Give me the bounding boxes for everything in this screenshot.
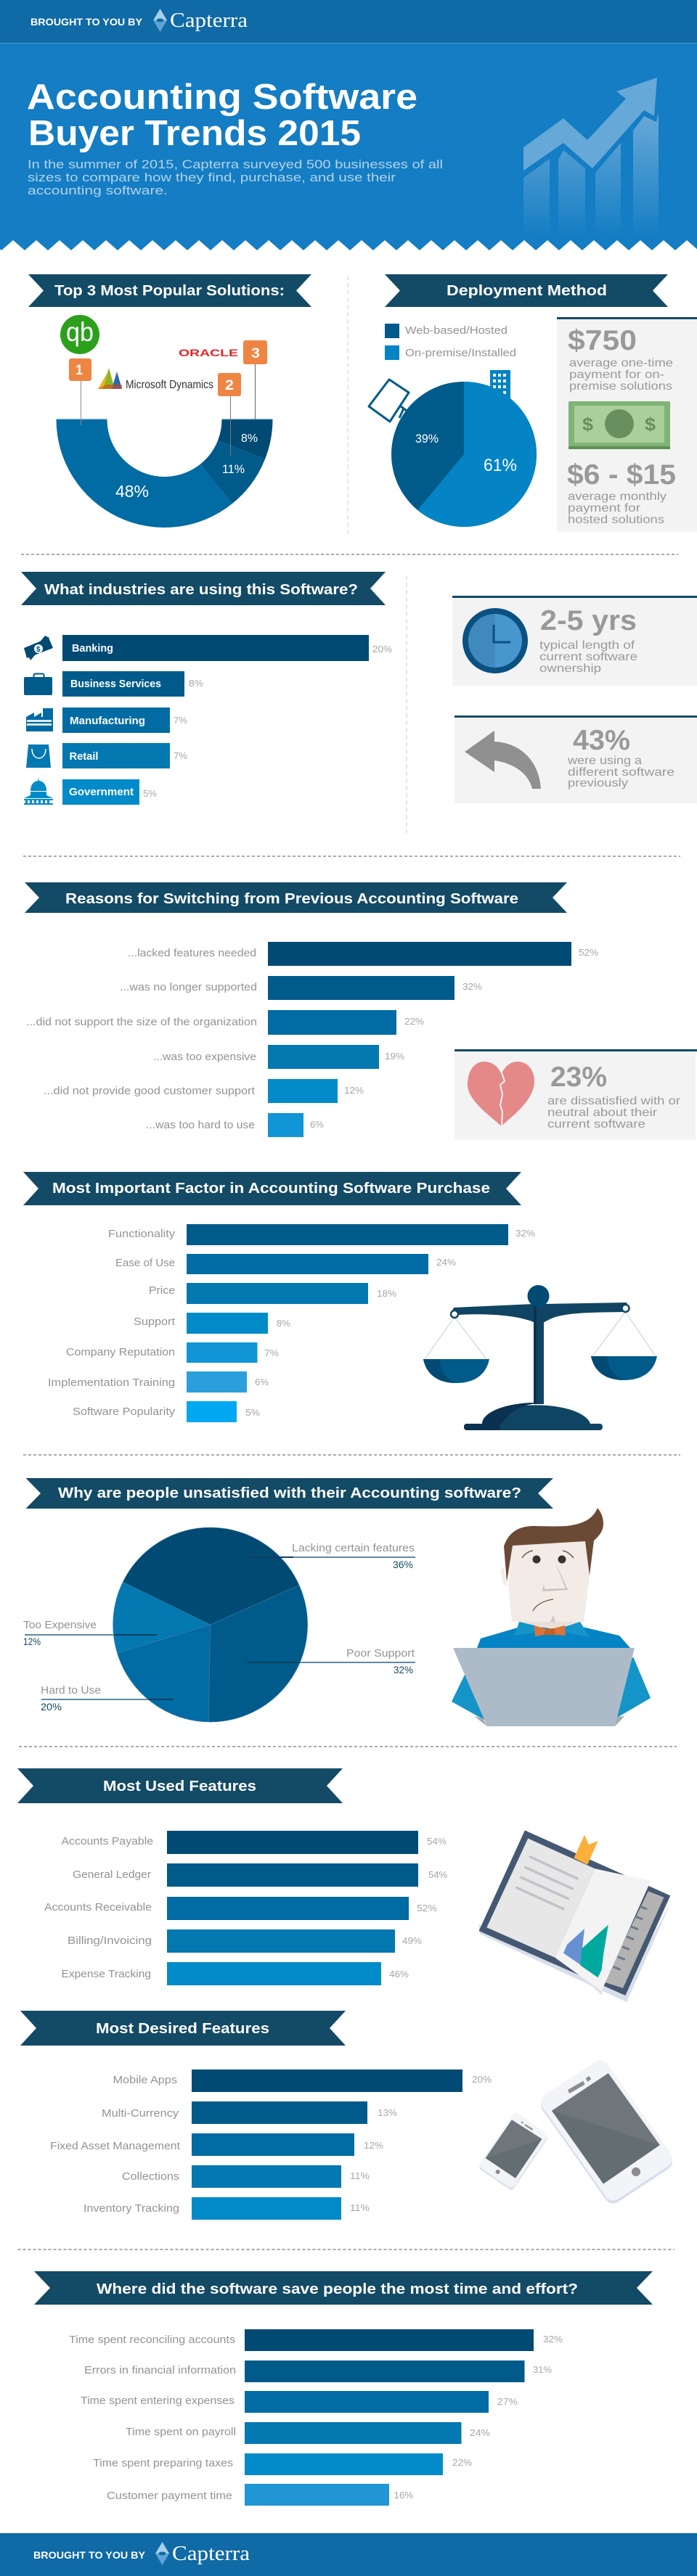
panel: pricing stats: $6 - $15	[567, 459, 676, 491]
legend: Web-based/Hosted	[405, 324, 508, 337]
bar: Fixed Asset Management: 12%	[364, 2140, 383, 2151]
heading: Most Desired Features	[96, 2021, 269, 2037]
pie chart	[113, 1527, 308, 1722]
icon: broken heart	[468, 1062, 534, 1126]
bar: Accounts Payable: Accounts Payable	[61, 1835, 153, 1847]
panel: previous software: were using a	[567, 755, 642, 767]
bar: General Ledger	[73, 1863, 447, 1887]
heading	[20, 2011, 346, 2046]
bar: Price	[149, 1283, 396, 1304]
bar: Fixed Asset Management: Fixed Asset Management	[50, 2140, 181, 2152]
bar: Billing/Invoicing: 49%	[402, 1935, 422, 1946]
title: Buyer Trends 2015	[28, 114, 361, 153]
panel: dissatisfied: neutral about their	[547, 1107, 658, 1119]
panel: previous software: different software	[568, 766, 674, 779]
callout: Oracle rank 3: 3	[251, 346, 260, 361]
heading	[26, 1478, 553, 1509]
bar: Software Popularity: 5%	[245, 1407, 260, 1418]
bar: Manufacturing: Manufacturing	[70, 715, 145, 727]
bar: Collections: Collections	[122, 2170, 179, 2183]
icon: dollar bill: $	[582, 414, 593, 435]
heading: Where did the software save people the most time and effort?	[97, 2281, 578, 2297]
bar: Collections: 11%	[350, 2170, 370, 2181]
panel: pricing stats: payment for	[568, 502, 641, 514]
bar: Manufacturing	[62, 707, 187, 733]
bar: customer support: 12%	[344, 1085, 364, 1096]
icon: briefcase	[24, 673, 52, 695]
bar: lacked features: ...lacked features needed	[128, 947, 256, 959]
bar: Multi-Currency	[102, 2101, 397, 2124]
heading: Most Important Factor in Accounting Software Purchase	[52, 1181, 490, 1197]
bar: entering expenses	[81, 2391, 518, 2413]
icon: return arrow	[465, 731, 541, 789]
bar: customer payment time: 16%	[394, 2490, 413, 2501]
bar: Multi-Currency: 13%	[378, 2107, 397, 2118]
label: poor support	[247, 1647, 415, 1675]
bar: customer support: ...did not provide good customer support	[44, 1085, 256, 1097]
bar: Multi-Currency: Multi-Currency	[102, 2107, 179, 2120]
bar: no longer supported	[120, 976, 482, 1000]
bar: errors in financial information	[84, 2360, 552, 2382]
heading: What industries are using this Software?	[44, 582, 358, 598]
label: hard to use: Hard to Use	[41, 1684, 101, 1697]
bar: Implementation Training: Implementation Training	[48, 1377, 175, 1389]
label: hard to use	[41, 1684, 174, 1712]
bar: Inventory Tracking: 11%	[350, 2202, 370, 2213]
bar: Ease of Use: Ease of Use	[115, 1257, 175, 1269]
bar: Expense Tracking: Expense Tracking	[61, 1968, 151, 1980]
heading	[23, 1172, 521, 1205]
panel: most important factor	[23, 1172, 657, 1430]
panel: dissatisfied: 23%	[550, 1062, 607, 1093]
icon: dollar bill	[568, 401, 670, 449]
panel: pricing stats	[557, 317, 697, 532]
heading	[21, 572, 386, 605]
label: lacking certain features: 36%	[393, 1559, 413, 1570]
icon: money: $	[36, 646, 41, 654]
title	[27, 78, 417, 153]
bar: Ease of Use	[115, 1254, 456, 1274]
intro text: In the summer of 2015, Capterra surveyed 500 businesses of all	[28, 157, 443, 171]
pie chart	[391, 382, 537, 527]
panel: previous software	[455, 715, 697, 803]
panel: time and effort saved	[34, 2271, 653, 2506]
label: too expensive	[23, 1619, 157, 1647]
label: hard to use: 20%	[41, 1701, 62, 1712]
bar: Retail: 7%	[174, 750, 187, 761]
bar: customer payment time	[107, 2484, 413, 2506]
bar: Billing/Invoicing: Billing/Invoicing	[68, 1935, 152, 1947]
bar: Software Popularity: Software Popularity	[73, 1406, 176, 1418]
panel: reasons for switching	[25, 882, 697, 1140]
icon: rising bar chart with arrow	[523, 78, 659, 238]
bar: Functionality	[108, 1224, 535, 1245]
bar: Software Popularity	[73, 1401, 260, 1422]
bar: Government: Government	[69, 786, 134, 798]
bar: Support	[134, 1313, 290, 1334]
callout: QuickBooks rank 1	[60, 315, 99, 425]
bar: preparing taxes: Time spent preparing taxes	[93, 2457, 233, 2469]
bar: Company Reputation	[66, 1342, 279, 1363]
bar: too hard to use	[146, 1113, 324, 1137]
heading	[385, 274, 668, 307]
panel: ownership length: typical length of	[539, 639, 635, 652]
label: lacking certain features	[248, 1542, 415, 1570]
bar: Ease of Use: 24%	[436, 1257, 456, 1268]
icon: dollar bill: $	[645, 414, 656, 435]
bar: Retail: Retail	[70, 750, 99, 763]
bar: preparing taxes: 22%	[452, 2457, 472, 2468]
bar: Expense Tracking	[61, 1962, 409, 1985]
panel: pricing stats: $750	[568, 325, 637, 356]
bar: entering expenses: Time spent entering expenses	[81, 2395, 235, 2407]
legend	[385, 324, 516, 360]
bar: payroll	[126, 2422, 490, 2444]
pie chart: 61%	[484, 456, 517, 475]
bar: Banking: Banking	[72, 642, 113, 655]
label: poor support: Poor Support	[346, 1647, 415, 1660]
half donut chart: 48%	[115, 482, 149, 501]
icon: monitor	[369, 380, 409, 422]
bar: Implementation Training	[48, 1371, 269, 1392]
panel: industries	[21, 572, 392, 805]
intro text: sizes to compare how they find, purchase, and use their	[28, 171, 396, 184]
bar: no longer supported: ...was no longer supported	[120, 981, 257, 993]
bar: customer payment time: Customer payment time	[107, 2490, 232, 2502]
bar: Support: 8%	[277, 1318, 290, 1329]
bar: Manufacturing: 7%	[174, 715, 187, 726]
half donut chart: 8%	[241, 432, 258, 445]
pie chart: 39%	[415, 432, 439, 446]
bar: General Ledger: 54%	[428, 1869, 447, 1880]
bar: Price: 18%	[377, 1288, 396, 1299]
bar: preparing taxes	[93, 2453, 472, 2475]
panel: ownership length: 2-5 yrs	[540, 605, 637, 636]
panel: dissatisfied	[455, 1049, 697, 1140]
bar: reconciling accounts: Time spent reconciling accounts	[69, 2334, 235, 2346]
callout: Microsoft Dynamics rank 2: Microsoft Dynamics	[126, 379, 213, 391]
bar: customer support	[44, 1079, 364, 1103]
half donut chart: 11%	[222, 462, 245, 476]
bar: lacked features: 52%	[579, 947, 598, 958]
panel: pricing stats: premise solutions	[569, 380, 672, 393]
title: Accounting Software	[27, 78, 417, 117]
panel: top 3 most popular solutions	[28, 274, 311, 528]
panel: dissatisfied: are dissatisfied with or	[547, 1095, 681, 1107]
heading	[34, 2271, 653, 2305]
top sponsor band	[0, 0, 697, 44]
bar: Inventory Tracking	[83, 2197, 370, 2220]
bar: payroll: 24%	[470, 2427, 490, 2438]
panel: deployment method	[369, 274, 697, 532]
callout: Oracle rank 3	[179, 340, 267, 419]
bar: Functionality: 32%	[515, 1228, 535, 1239]
icon: balance scales	[423, 1285, 657, 1430]
intro text	[28, 157, 443, 197]
icon: factory	[26, 708, 53, 731]
bar: Accounts Receivable: 52%	[417, 1903, 437, 1913]
callout: QuickBooks rank 1: 1	[76, 363, 83, 378]
bar: size of organization	[26, 1010, 424, 1035]
bar: Company Reputation: Company Reputation	[66, 1346, 175, 1358]
bar: too expensive: ...was too expensive	[153, 1051, 256, 1063]
bar: Price: Price	[149, 1284, 175, 1297]
bar: Government	[62, 779, 157, 805]
bar: size of organization: ...did not support the size of the organization	[26, 1016, 257, 1028]
bar: Mobile Apps: Mobile Apps	[113, 2074, 177, 2086]
bar: too hard to use: 6%	[310, 1119, 324, 1130]
bar: Company Reputation: 7%	[264, 1348, 279, 1358]
bar: Retail	[62, 743, 187, 768]
icon: money	[24, 636, 53, 660]
bar: no longer supported: 32%	[462, 981, 482, 992]
bar: Mobile Apps: 20%	[472, 2074, 492, 2085]
icon: tablet	[550, 2069, 664, 2194]
illustration: confused man at laptop	[452, 1508, 651, 1726]
bar: Government: 5%	[143, 788, 157, 799]
bar: entering expenses: 27%	[497, 2396, 518, 2407]
footer: BROUGHT TO YOU BY	[33, 2549, 146, 2561]
top sponsor band: BROUGHT TO YOU BY	[30, 16, 143, 28]
icon: phone	[483, 2117, 544, 2186]
callout: QuickBooks rank 1: qb	[66, 317, 94, 347]
bar: Support: Support	[134, 1316, 176, 1328]
callout: Microsoft Dynamics rank 2	[98, 368, 241, 456]
panel: ownership length: ownership	[539, 663, 601, 675]
bar: Business Services: 8%	[189, 678, 203, 689]
bar: Banking	[62, 635, 392, 661]
panel: most desired features	[20, 2011, 664, 2220]
bar: too expensive	[153, 1045, 404, 1069]
bar: Implementation Training: 6%	[255, 1377, 269, 1387]
legend: On-premise/Installed	[405, 347, 516, 359]
icon: clock	[462, 608, 528, 673]
icon: capitol building	[24, 777, 53, 805]
panel: previous software: previously	[568, 777, 628, 789]
heading: Reasons for Switching from Previous Accounting Software	[65, 891, 518, 907]
panel: previous software: 43%	[573, 725, 630, 756]
bar: Accounts Payable: 54%	[427, 1836, 447, 1847]
heading: Why are people unsatisfied with their Accounting software?	[58, 1485, 521, 1501]
panel: pricing stats: payment for on-	[569, 369, 664, 381]
bar: Accounts Receivable	[44, 1897, 437, 1920]
bar: Business Services	[62, 671, 203, 697]
heading	[28, 274, 311, 307]
panel: pricing stats: average monthly	[568, 491, 667, 503]
bar: reconciling accounts: 32%	[543, 2334, 563, 2345]
bar: Expense Tracking: 46%	[389, 1969, 409, 1980]
bar: size of organization: 22%	[404, 1016, 424, 1027]
bar: Business Services: Business Services	[70, 678, 161, 690]
half donut chart	[57, 419, 273, 528]
panel: pricing stats: average one-time	[569, 357, 673, 369]
bar: Banking: 20%	[372, 644, 392, 655]
label: lacking certain features: Lacking certain features	[292, 1542, 415, 1554]
panel: ownership length	[452, 596, 697, 686]
illustration: open book	[478, 1830, 672, 2002]
intro text: accounting software.	[28, 184, 168, 197]
bar: Inventory Tracking: Inventory Tracking	[83, 2202, 179, 2215]
bar: reconciling accounts	[69, 2329, 563, 2351]
bar: Accounts Receivable: Accounts Receivable	[44, 1901, 152, 1913]
top sponsor band: Capterra	[170, 9, 248, 32]
panel: ownership length: current software	[539, 651, 637, 663]
heading: Top 3 Most Popular Solutions:	[54, 283, 285, 299]
bar: too expensive: 19%	[385, 1051, 404, 1062]
callout: Microsoft Dynamics rank 2: 2	[225, 378, 234, 393]
bar: General Ledger: General Ledger	[73, 1869, 151, 1881]
bar: Collections	[122, 2165, 370, 2188]
label: too expensive: 12%	[23, 1636, 41, 1647]
panel: pricing stats: hosted solutions	[568, 514, 664, 526]
callout: Oracle rank 3: ORACLE	[179, 347, 238, 358]
footer	[0, 2533, 697, 2576]
bar: Accounts Payable	[61, 1831, 447, 1854]
footer: Capterra	[172, 2542, 250, 2565]
heading: Most Used Features	[103, 1779, 256, 1794]
bar: Mobile Apps	[113, 2070, 492, 2092]
heading	[25, 882, 567, 913]
header banner	[0, 0, 697, 250]
bar: Fixed Asset Management	[50, 2133, 383, 2156]
label: poor support: 32%	[394, 1664, 413, 1675]
panel: most used features	[17, 1768, 672, 2002]
heading: Deployment Method	[447, 283, 607, 299]
bar: lacked features	[128, 942, 598, 966]
bar: payroll: Time spent on payroll	[126, 2426, 236, 2438]
bar: errors in financial information: Errors in financial information	[84, 2364, 236, 2376]
panel: dissatisfied: current software	[547, 1118, 645, 1131]
heading	[17, 1768, 343, 1803]
bar: Billing/Invoicing	[68, 1929, 422, 1953]
bar: Functionality: Functionality	[108, 1228, 176, 1240]
bar: errors in financial information: 31%	[533, 2364, 552, 2375]
icon: office building	[490, 370, 510, 406]
bar: too hard to use: ...was too hard to use	[146, 1119, 255, 1131]
panel: why unsatisfied	[23, 1478, 651, 1726]
label: too expensive: Too Expensive	[23, 1619, 97, 1631]
icon: shopping bag	[26, 745, 51, 768]
